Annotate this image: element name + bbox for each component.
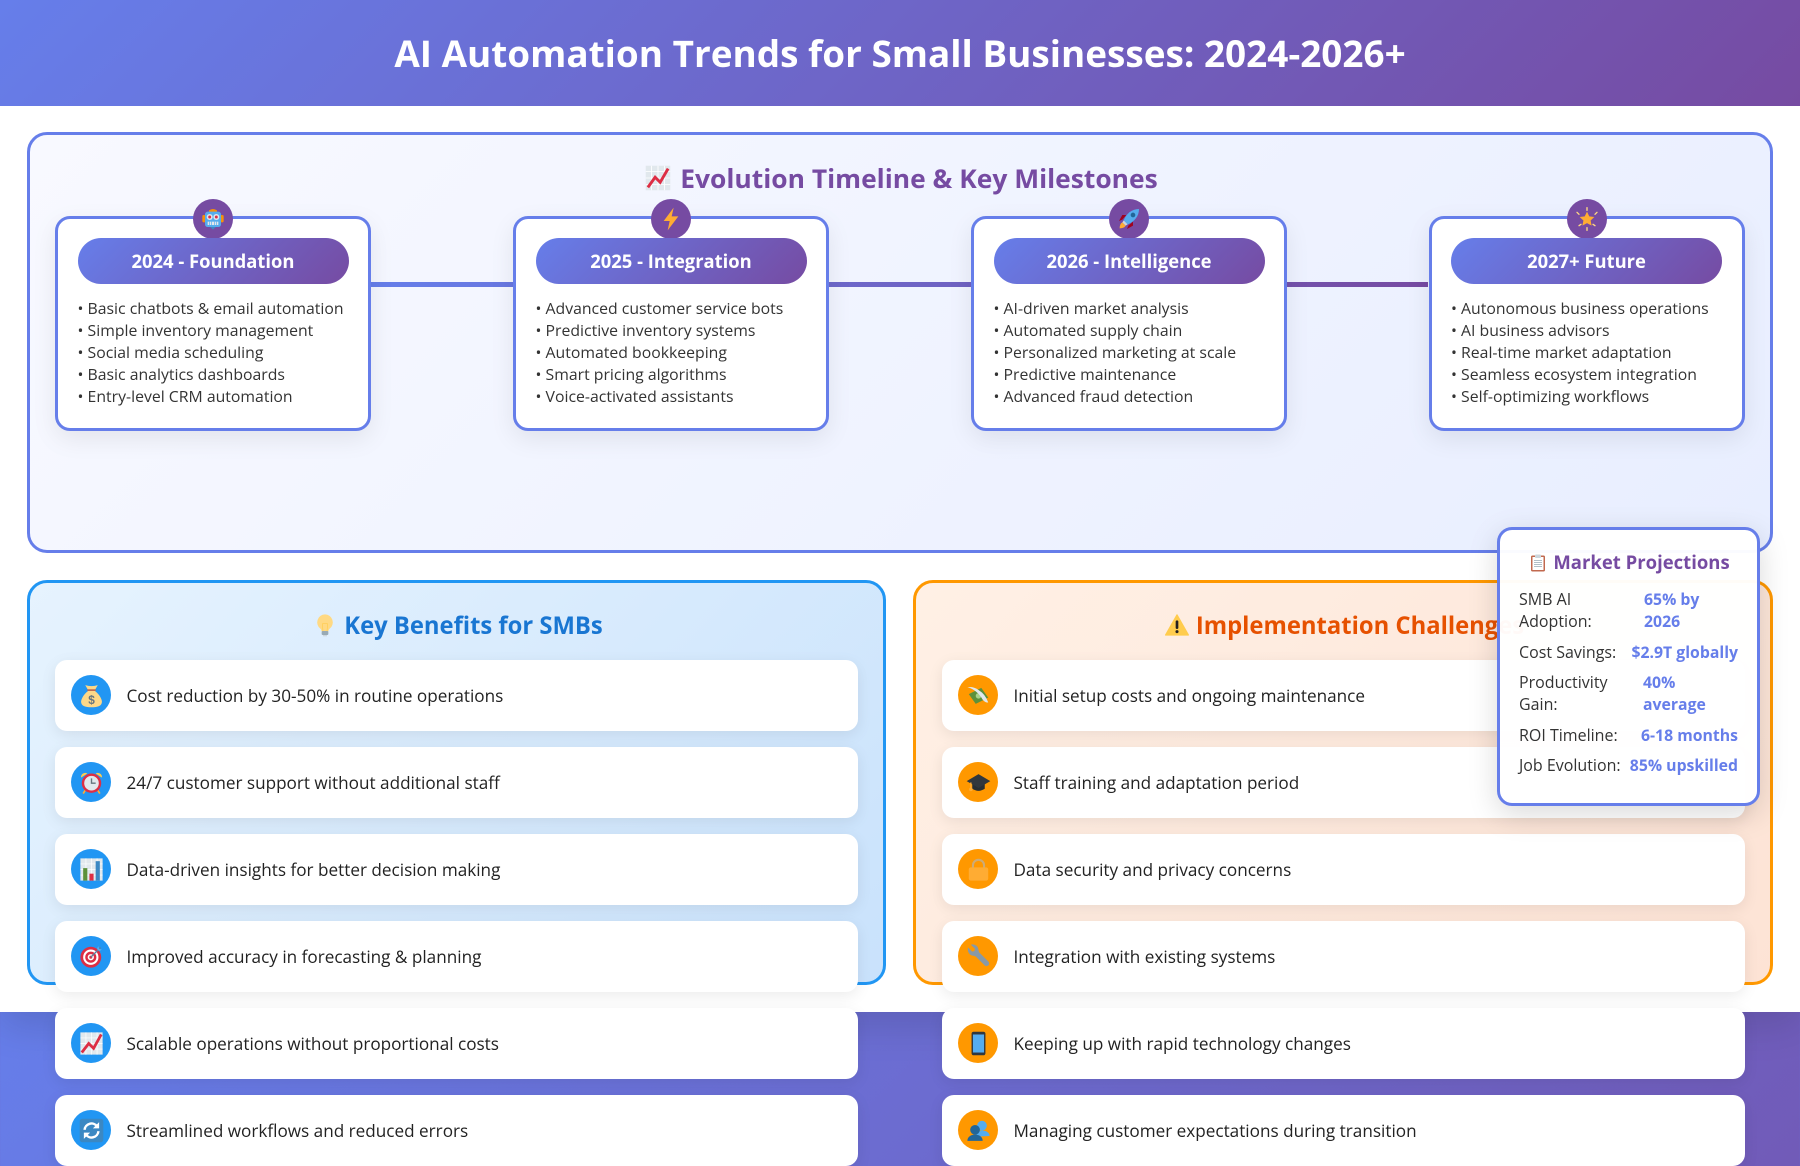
icon: alarm clock <box>71 762 111 802</box>
icon: phone <box>958 1023 998 1063</box>
value: productivity: 40% <box>1643 671 1675 693</box>
milestone list <box>536 297 783 407</box>
icon: bar chart <box>71 849 111 889</box>
milestone list: • Autonomous business operations <box>1451 297 1709 319</box>
milestone list: • Smart pricing algorithms <box>536 363 727 385</box>
panel: implementation challenges <box>913 580 1773 1166</box>
icon: lightning <box>651 199 691 239</box>
value: adoption: 2026 <box>1644 610 1680 632</box>
callout heading: Market Projections <box>1553 550 1730 575</box>
milestone: 2026 <box>971 216 1287 431</box>
benefit: scalability <box>55 1008 858 1079</box>
icon: lock <box>958 849 998 889</box>
icon: wrench <box>958 936 998 976</box>
milestone list: • Social media scheduling <box>78 341 263 363</box>
icon: money with wings <box>958 675 998 715</box>
challenge text: Integration with existing systems <box>1014 946 1275 969</box>
benefit: workflows <box>55 1095 858 1166</box>
heading: implementation challenges: Implementation Challenges <box>1196 609 1524 641</box>
label: productivity: Gain: <box>1519 693 1558 715</box>
milestone heading <box>78 238 348 284</box>
icon: robot <box>193 199 233 239</box>
value: productivity: average <box>1643 693 1706 715</box>
benefit text: Streamlined workflows and reduced errors <box>126 1120 468 1143</box>
milestone list: • AI-driven market analysis <box>994 297 1189 319</box>
icon: refresh arrows <box>71 1110 111 1150</box>
label: cost savings: Cost Savings: <box>1519 641 1616 663</box>
callout: market projections <box>1497 527 1760 806</box>
icon: graduation cap <box>958 762 998 802</box>
panel: key benefits <box>27 580 886 1166</box>
challenge: customer expectations <box>942 1095 1745 1166</box>
milestone list: • Simple inventory management <box>78 319 313 341</box>
icon: glowing star <box>1566 199 1606 239</box>
milestone list: • Advanced fraud detection <box>994 385 1193 407</box>
challenge: technology pace <box>942 1008 1745 1079</box>
benefit text: Improved accuracy in forecasting & planning <box>126 946 481 969</box>
title: AI Automation Trends for Small Businesses: 2024-2026+ <box>394 28 1406 78</box>
milestone heading: 2026 - Intelligence <box>1046 249 1212 274</box>
milestone heading <box>536 238 806 284</box>
label: ROI timeline: ROI Timeline: <box>1519 724 1618 746</box>
benefit text: 24/7 customer support without additional staff <box>126 772 500 795</box>
milestone: 2024 <box>55 216 371 431</box>
timeline connector <box>371 282 1428 287</box>
milestone heading: 2027+ Future <box>1527 249 1646 274</box>
milestone list: • Automated bookkeeping <box>536 341 727 363</box>
icon: rocket <box>1109 199 1149 239</box>
milestone heading <box>1451 238 1722 284</box>
milestone list: • Self-optimizing workflows <box>1451 385 1649 407</box>
challenge: training <box>942 747 1745 818</box>
value: job evolution: 85% upskilled <box>1630 754 1738 776</box>
icon: money bag <box>71 675 111 715</box>
milestone list: • Personalized marketing at scale <box>994 341 1236 363</box>
benefit text: Cost reduction by 30-50% in routine operations <box>126 685 503 708</box>
milestone list <box>1451 297 1709 407</box>
challenge text: Keeping up with rapid technology changes <box>1014 1033 1351 1056</box>
value: adoption: 65% by <box>1644 588 1699 610</box>
panel: evolution timeline <box>27 132 1773 553</box>
benefit text: Data-driven insights for better decision making <box>126 859 500 882</box>
milestone list: • Basic chatbots & email automation <box>78 297 344 319</box>
challenge: setup costs <box>942 660 1745 731</box>
title <box>0 0 1800 106</box>
milestone list: • Predictive inventory systems <box>536 319 755 341</box>
milestone heading <box>994 238 1264 284</box>
milestone list: • Basic analytics dashboards <box>78 363 285 385</box>
benefit: accuracy <box>55 921 858 992</box>
icon: target <box>71 936 111 976</box>
label: job evolution: Job Evolution: <box>1519 754 1621 776</box>
milestone list: • Advanced customer service bots <box>536 297 783 319</box>
icon: money bag: $ <box>88 692 95 706</box>
milestone list: • Automated supply chain <box>994 319 1182 341</box>
milestone: 2027+ <box>1428 216 1744 431</box>
heading: evolution timeline: Evolution Timeline & Key Milestones <box>680 160 1158 196</box>
milestone heading: 2025 - Integration <box>590 249 752 274</box>
icon: people <box>958 1110 998 1150</box>
benefit: insights <box>55 834 858 905</box>
milestone list: • AI business advisors <box>1451 319 1609 341</box>
benefit: customer support <box>55 747 858 818</box>
label: productivity: Productivity <box>1519 671 1608 693</box>
label: adoption: Adoption: <box>1519 610 1592 632</box>
challenge text: Staff training and adaptation period <box>1014 772 1299 795</box>
milestone list: • Entry-level CRM automation <box>78 385 293 407</box>
milestone list <box>78 297 344 407</box>
challenge text: Managing customer expectations during transition <box>1014 1120 1417 1143</box>
icon: rising chart <box>71 1023 111 1063</box>
benefit: cost reduction <box>55 660 858 731</box>
label: adoption: SMB AI <box>1519 588 1571 610</box>
challenge text: Initial setup costs and ongoing maintenance <box>1014 685 1365 708</box>
value: cost savings: $2.9T globally <box>1631 641 1738 663</box>
label: productivity <box>1519 671 1608 715</box>
challenge: security <box>942 834 1745 905</box>
milestone list: • Predictive maintenance <box>994 363 1176 385</box>
milestone: 2025 <box>513 216 829 431</box>
label: adoption <box>1519 588 1592 632</box>
challenge: integration <box>942 921 1745 992</box>
challenge text: Data security and privacy concerns <box>1014 859 1291 882</box>
milestone list: • Voice-activated assistants <box>536 385 733 407</box>
milestone list: • Real-time market adaptation <box>1451 341 1672 363</box>
milestone list <box>994 297 1236 407</box>
value: adoption <box>1644 588 1700 632</box>
benefit text: Scalable operations without proportional costs <box>126 1033 499 1056</box>
heading: key benefits: Key Benefits for SMBs <box>344 609 603 641</box>
milestone list: • Seamless ecosystem integration <box>1451 363 1697 385</box>
value: productivity <box>1643 671 1706 715</box>
milestone heading: 2024 - Foundation <box>131 249 294 274</box>
value: ROI timeline: 6-18 months <box>1641 724 1738 746</box>
